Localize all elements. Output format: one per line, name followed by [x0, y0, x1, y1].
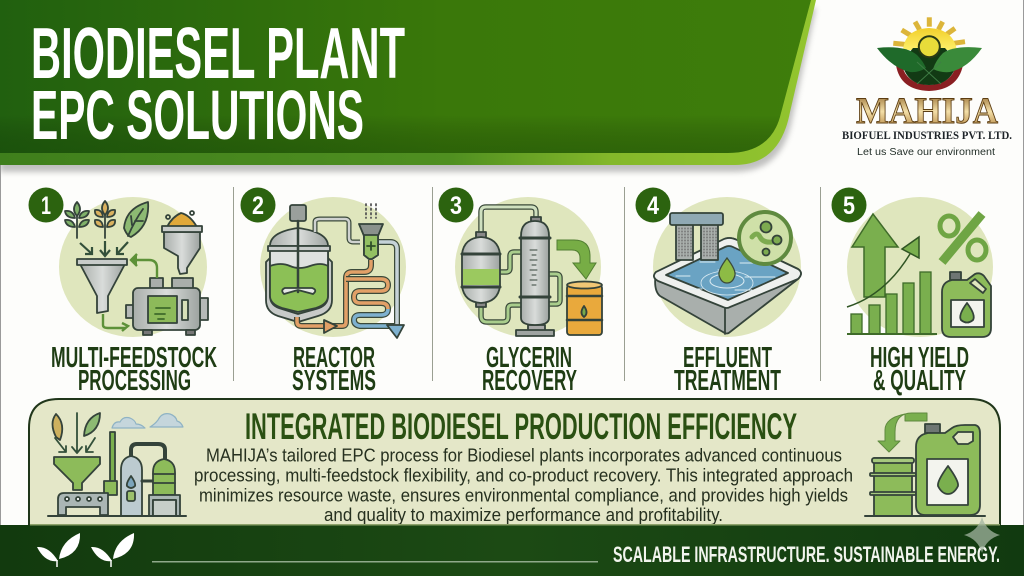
icon: filter screens — [670, 213, 723, 260]
header banner — [0, 0, 816, 172]
recovery arrow — [557, 240, 596, 279]
orange heat exchange coil — [297, 260, 395, 326]
panel: glycerin recovery — [438, 188, 602, 397]
icon: feedstock plants — [65, 201, 148, 238]
step badge 5: 5 — [843, 192, 855, 220]
label — [292, 342, 376, 397]
grey return pipe with arrow — [378, 242, 397, 325]
icon backdrop — [59, 197, 207, 337]
icon: main funnel — [77, 259, 127, 313]
label — [51, 342, 217, 397]
panel body text: MAHIJA’s tailored EPC process for Biodiesel plants incorporates advanced continuous — [206, 446, 842, 466]
step badge 1: 1 — [41, 192, 51, 220]
panel: integrated production efficiency — [29, 399, 1000, 530]
panel background — [29, 399, 1000, 530]
icon: integrated plant — [48, 413, 186, 516]
icon: microbe petri dish — [739, 212, 791, 264]
sparkle mark — [964, 517, 1000, 553]
percent sign — [940, 214, 986, 262]
icon: barrel and jug with recycling arrow — [865, 413, 985, 516]
panel body text: and quality to maximize performance and profitability. — [324, 505, 723, 525]
step badge 5 — [832, 188, 866, 222]
arrows into funnel — [80, 241, 128, 256]
icon: press machine — [126, 278, 208, 335]
label: MULTI-FEEDSTOCK — [51, 342, 217, 374]
column dividers — [234, 187, 820, 381]
step badge 3 — [438, 188, 474, 222]
title: BIODIESEL PLANT — [31, 14, 405, 94]
label — [482, 342, 577, 397]
label: REACTOR — [293, 342, 375, 374]
label — [674, 342, 781, 397]
logo name: MAHIJA — [856, 91, 998, 132]
icon: water drop — [719, 258, 735, 283]
label — [870, 342, 969, 397]
icon: sun and leaves emblem — [877, 17, 982, 91]
label: TREATMENT — [674, 365, 781, 397]
flow arrowheads — [324, 320, 404, 338]
logo subtitle: BIOFUEL INDUSTRIES PVT. LTD. — [842, 130, 1012, 142]
title: EPC SOLUTIONS — [31, 76, 364, 154]
label: GLYCERIN — [486, 342, 572, 374]
label: PROCESSING — [78, 365, 191, 397]
icon: reactor vessel — [266, 205, 332, 322]
panel: multi-feedstock processing — [28, 188, 217, 397]
label: EFFLUENT — [683, 342, 772, 374]
recycle arrows — [103, 254, 157, 331]
label: SYSTEMS — [292, 365, 376, 397]
panel: high yield and quality — [832, 188, 993, 397]
step badge 4 — [636, 188, 670, 222]
logo tagline: Let us Save our environment — [857, 146, 995, 158]
footer bar — [0, 517, 1024, 576]
connecting pipes — [481, 207, 560, 322]
panel: effluent treatment — [636, 188, 801, 397]
icon: treatment basin — [654, 238, 801, 334]
icon: separator vessel — [462, 232, 500, 307]
grey feed pipe — [315, 219, 360, 242]
step badge 2 — [240, 188, 276, 222]
icon: up arrow — [852, 214, 898, 297]
icon backdrop — [847, 197, 993, 337]
step badge 2: 2 — [252, 192, 264, 220]
step badge 1 — [28, 188, 64, 222]
title — [31, 14, 405, 154]
step badge 3: 3 — [450, 192, 462, 220]
panel body text — [194, 446, 853, 525]
icon backdrop — [455, 197, 601, 337]
footer divider line — [152, 561, 598, 562]
icon: glycerin barrel — [567, 282, 602, 335]
panel body text: minimizes resource waste, ensures environmental compliance, and provides high yields — [199, 486, 848, 506]
step badge 4: 4 — [647, 192, 659, 220]
icon: dosing funnel — [359, 204, 383, 259]
icon backdrop — [260, 197, 406, 337]
icon: distillation column — [516, 217, 554, 336]
growth curve arrow — [847, 237, 919, 307]
company logo — [842, 17, 1012, 158]
icon: product jug — [942, 272, 991, 337]
icon: secondary hopper — [162, 211, 202, 274]
panel body text: processing, multi-feedstock flexibility, and co-product recovery. This integrated approach — [194, 466, 853, 486]
bar chart — [847, 272, 937, 334]
icon: white leaves — [37, 533, 134, 567]
label: RECOVERY — [482, 365, 577, 397]
panel: reactor systems — [240, 188, 406, 397]
icon backdrop — [653, 197, 801, 337]
